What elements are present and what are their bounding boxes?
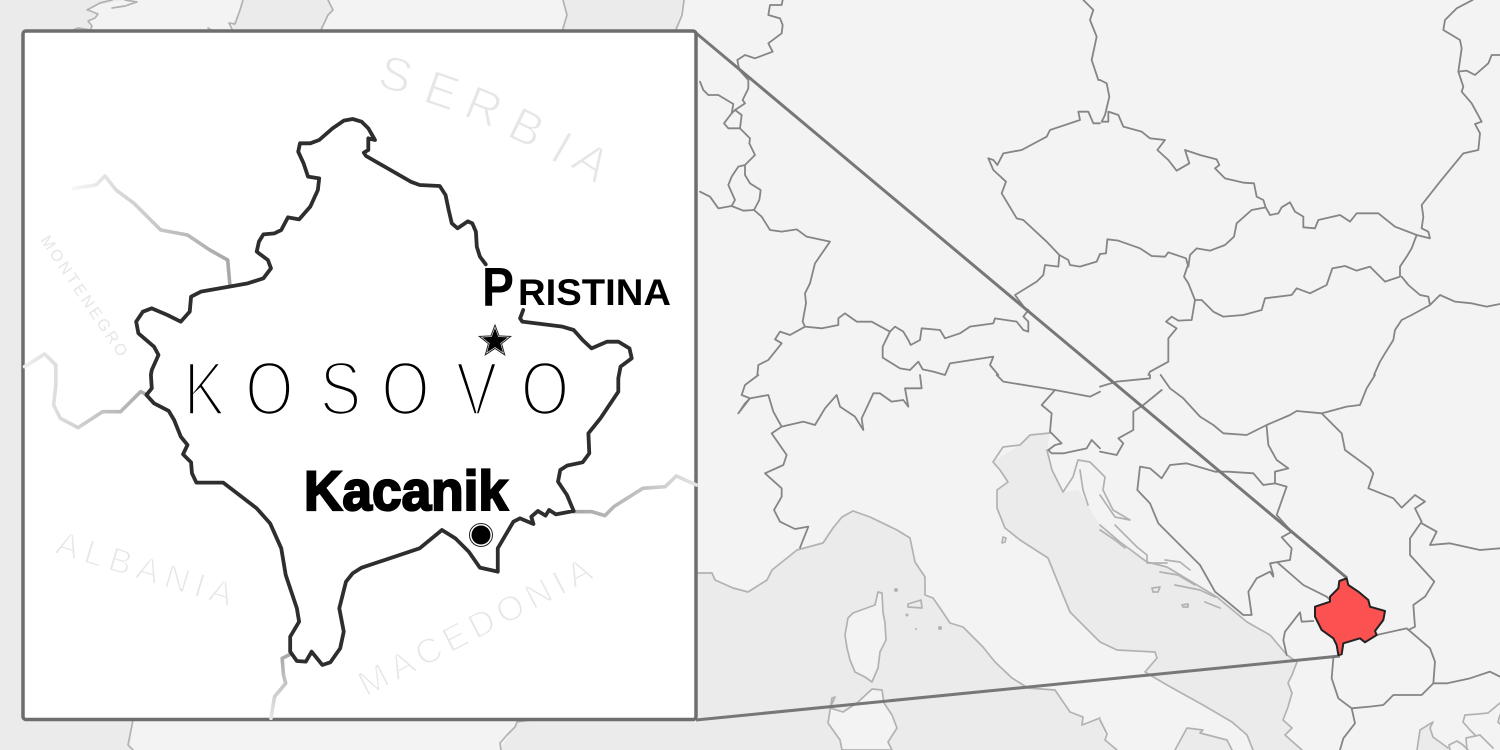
label: Serbia: S [373, 46, 418, 105]
label: Pristina [482, 256, 671, 318]
coast: France and western Italy [696, 511, 1100, 725]
icon: capital star [479, 325, 511, 355]
label: Serbia: I [542, 122, 580, 175]
Sardinia [828, 689, 897, 750]
country borders [700, 0, 1500, 750]
borders: upper right [1100, 0, 1500, 375]
label: Pristina: RISTINA [518, 272, 671, 313]
coast: Greece [1417, 722, 1448, 750]
borders: upper left [700, 0, 1100, 375]
coast: Balkans [1047, 450, 1130, 520]
panel frame [23, 31, 696, 720]
label: Macedonia: MACEDONIA [352, 550, 599, 704]
small islands [894, 588, 898, 592]
label: Serbia: R [457, 76, 509, 138]
label: Montenegro: MONTENEGRO [37, 233, 130, 360]
label: Serbia [373, 46, 619, 193]
label: Serbia: A [563, 131, 619, 193]
Kosovo outline [136, 119, 632, 665]
Corsica [845, 592, 886, 682]
label: Serbia: E [418, 61, 465, 122]
Kosovo highlighted on main map [1315, 578, 1385, 655]
icon: Kacanik dot [470, 524, 492, 546]
inset panel [23, 31, 696, 720]
connector lines from Kosovo to inset [696, 33, 1347, 720]
coast: Italy east [993, 433, 1253, 750]
label: Serbia: B [500, 98, 552, 159]
label: Kosovo: KOSOVO [184, 346, 569, 431]
label: Kacanik: Kacanik [304, 459, 509, 522]
borders: lower right [1100, 375, 1500, 750]
label: Albania: ALBANIA [52, 524, 238, 614]
label: Pristina: P [482, 256, 514, 318]
borders: lower left [738, 375, 1100, 548]
faded neighbouring borders [25, 176, 696, 718]
